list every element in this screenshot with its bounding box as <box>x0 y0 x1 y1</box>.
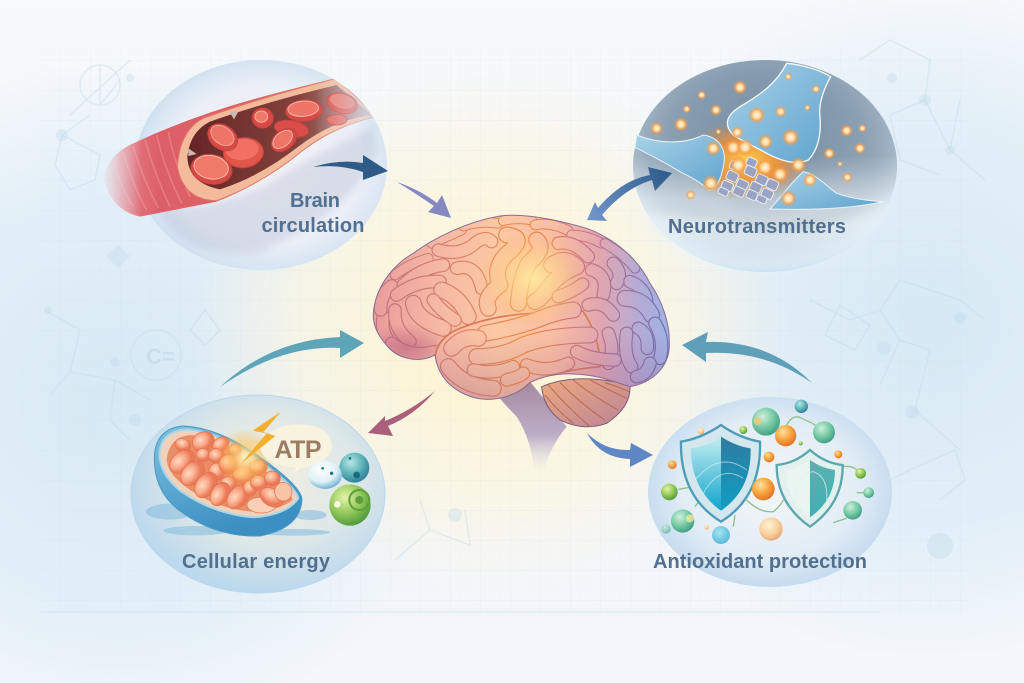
arrow: neurotransmitters two-way <box>587 167 672 221</box>
arrow: circulation dark blue <box>313 155 388 180</box>
panel: antioxidant protection <box>648 397 892 587</box>
molecules <box>661 400 874 544</box>
green sphere <box>329 484 371 526</box>
axon terminal <box>727 63 831 162</box>
label: antioxidant protection: Antioxidant protection <box>653 551 867 573</box>
warm central glow on the folds <box>486 238 582 319</box>
synapse illustration <box>635 63 883 209</box>
label: brain circulation: Brain <box>290 190 340 212</box>
red blood cells <box>189 90 360 187</box>
panel: brain circulation <box>103 60 387 270</box>
dendrite left <box>635 135 724 191</box>
right shield <box>777 450 843 527</box>
background wash and faint scientific pattern: C= <box>146 344 175 369</box>
arrow: brain to cellular energy rose <box>368 391 435 436</box>
arrow: cellular energy to brain teal <box>220 330 364 387</box>
neurotransmitter glows <box>650 73 867 207</box>
arrow: antioxidant to brain teal <box>682 332 812 383</box>
panel: neurotransmitters <box>633 60 897 272</box>
mitochondrion <box>154 426 302 536</box>
cerebellum <box>542 379 630 427</box>
label: neurotransmitters: Neurotransmitters <box>668 216 846 238</box>
arrow: brain to antioxidant blue <box>587 433 653 467</box>
label: ATP: ATP <box>274 436 322 464</box>
arrow: circulation to brain purple <box>397 182 451 218</box>
blood vessel illustration <box>103 77 380 254</box>
left shield <box>681 425 760 522</box>
dendrite right <box>770 172 883 209</box>
brain stem <box>498 382 567 472</box>
receptor grid <box>717 157 779 204</box>
panel disc: antioxidant <box>648 397 892 587</box>
panel disc: cellular energy <box>131 395 385 593</box>
mitochondrion, ATP and spheres <box>146 412 371 536</box>
gyri: rear lobe <box>625 298 652 315</box>
panel disc: synapse <box>633 60 897 272</box>
gyri: top edge and central folds <box>503 219 532 221</box>
ATP bubble <box>260 424 332 474</box>
label line 2: circulation <box>262 215 364 237</box>
panel: cellular energy <box>131 395 385 593</box>
shields and antioxidant molecules <box>661 400 874 544</box>
gyri: rear and frontal folds <box>383 317 393 347</box>
lightning bolt <box>241 412 281 464</box>
gyri: temporal lobe <box>435 308 600 402</box>
panel disc: circulation <box>135 60 387 270</box>
teal sphere <box>339 453 369 483</box>
central brain <box>360 215 680 472</box>
label: cellular energy: Cellular energy <box>182 551 331 573</box>
white sphere <box>308 461 342 489</box>
cerebrum <box>360 215 680 407</box>
